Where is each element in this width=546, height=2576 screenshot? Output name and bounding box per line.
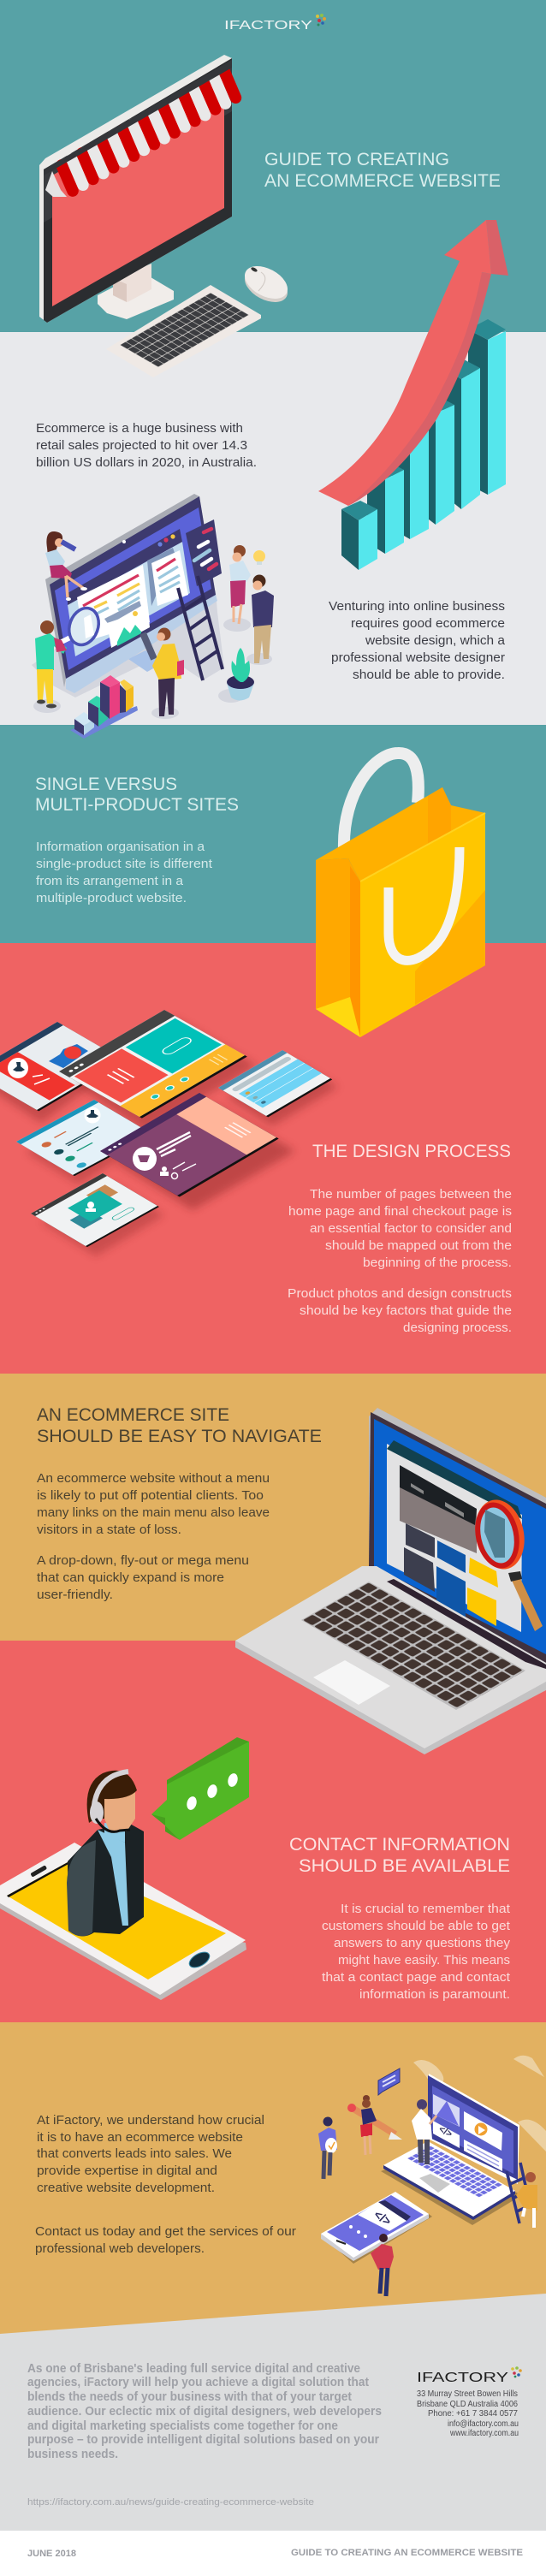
intro text: billion US dollars in 2020, in Australia. — [36, 455, 257, 470]
logo: iFactory footer: IFACTORY — [417, 2371, 508, 2385]
design process text: should be mapped out from the — [325, 1238, 512, 1253]
company description: audience. Our eclectic mix of digital designers, web developers — [27, 2405, 382, 2419]
woman with pencil — [347, 2095, 402, 2155]
big monitor — [45, 494, 217, 693]
contact text: might have easily. This means — [338, 1953, 510, 1968]
icon: smartphone — [0, 1843, 246, 2000]
single product text — [36, 840, 213, 905]
headset — [90, 1772, 130, 1831]
heading: contact information: CONTACT INFORMATION — [289, 1835, 510, 1855]
single product text: multiple-product website. — [36, 891, 187, 905]
person with green top — [33, 620, 67, 713]
logo: iFactory footer — [417, 2366, 522, 2385]
title: GUIDE TO CREATING — [264, 150, 449, 169]
icon: support agent with headset — [67, 1771, 144, 1937]
design process text: beginning of the process. — [363, 1255, 512, 1270]
venturing text: requires good ecommerce — [351, 616, 505, 631]
floor shadow — [32, 591, 224, 697]
company description: purpose – to provide intelligent digital solutions based on your — [27, 2433, 379, 2447]
intro text: retail sales projected to hit over 14.3 — [36, 438, 247, 453]
purple laptop — [381, 2074, 522, 2225]
arrow: rising red arrow — [318, 220, 508, 506]
single product text: Information organisation in a — [36, 840, 205, 854]
man in yellow — [143, 628, 184, 719]
panel: gold ifactory background — [0, 2022, 546, 2334]
navigation text: many links on the main menu also leave — [37, 1505, 270, 1520]
heading: the design process: THE DESIGN PROCESS — [312, 1142, 511, 1161]
laptop lid — [369, 1408, 546, 1665]
icon: keyboard — [106, 285, 261, 377]
intro text — [36, 421, 257, 470]
logo: iFactory header: IFACTORY — [224, 19, 312, 33]
ifactory text: professional web developers. — [35, 2241, 205, 2256]
contact text: information is paramount. — [359, 1987, 510, 2002]
icon: green chat bubble — [151, 1737, 249, 1840]
navigation text — [37, 1471, 270, 1602]
card: purple and peach page — [100, 1093, 295, 1210]
icon: yellow shopping bag — [316, 753, 485, 1037]
bag front handle — [389, 847, 460, 960]
panel: red design process background — [0, 943, 546, 1374]
bag side — [316, 858, 360, 1037]
navigation text: that can quickly expand is more — [37, 1570, 224, 1585]
monitor frame — [39, 55, 232, 323]
mini bar chart — [70, 675, 138, 739]
heading: easy to navigate: SHOULD BE EASY TO NAVIGATE — [37, 1427, 322, 1446]
company description — [27, 2362, 382, 2461]
address block: www.ifactory.com.au — [449, 2429, 519, 2438]
contact text — [322, 1902, 511, 2002]
ifactory text: it is to have an ecommerce website — [37, 2130, 243, 2145]
address block: Brisbane QLD Australia 4006 — [417, 2400, 518, 2409]
navigation text: A drop-down, fly-out or mega menu — [37, 1553, 249, 1568]
illustration: web developers team — [318, 2056, 546, 2296]
heading: single versus multi-product sites: MULTI-PRODUCT SITES — [35, 795, 239, 815]
company description: agencies, iFactory will help you achieve a digital solution that — [27, 2376, 369, 2389]
heading: easy to navigate — [37, 1405, 322, 1446]
footer date: JUNE 2018 — [27, 2549, 76, 2559]
contact text: answers to any questions they — [334, 1936, 510, 1950]
purple phone — [321, 2192, 432, 2264]
design process text: The number of pages between the — [310, 1187, 512, 1202]
navigation text: An ecommerce website without a menu — [37, 1471, 270, 1486]
laptop base — [235, 1566, 546, 1754]
heading: contact information — [289, 1835, 510, 1876]
illustration: website page cards — [0, 1010, 338, 1256]
card: teal and yellow layout — [59, 1010, 257, 1131]
panel: white footer strip — [0, 2531, 546, 2576]
awning top edge — [44, 60, 232, 175]
address block: 33 Murray Street Bowen Hills — [417, 2389, 518, 2399]
bag front — [360, 813, 485, 1037]
single product text: from its arrangement in a — [36, 874, 184, 888]
bar 4 — [418, 395, 454, 525]
woman with red skirt — [223, 545, 251, 632]
venturing text: professional website designer — [331, 650, 505, 665]
bag back handle — [344, 753, 418, 849]
ifactory text — [35, 2113, 296, 2256]
bar 3 — [392, 420, 429, 539]
intro text: Ecommerce is a huge business with — [36, 421, 243, 436]
agent hair — [87, 1771, 137, 1823]
agent jacket — [68, 1823, 144, 1936]
bag inner — [316, 787, 485, 881]
design process text: designing process. — [403, 1321, 512, 1335]
address block: info@ifactory.com.au — [448, 2419, 519, 2429]
design process text: should be key factors that guide the — [300, 1303, 512, 1318]
bar 5 — [443, 359, 480, 509]
side panel — [186, 519, 222, 586]
panel: teal single versus multi-product background — [0, 725, 546, 943]
address block: Phone: +61 7 3844 0577 — [428, 2409, 518, 2419]
ifactory text: At iFactory, we understand how crucial — [37, 2113, 264, 2128]
contact text: customers should be able to get — [322, 1919, 511, 1933]
stand — [128, 650, 163, 672]
ifactory text: provide expertise in digital and — [37, 2163, 217, 2178]
ladder — [178, 576, 223, 680]
company description: blends the needs of your business with that of your target — [27, 2390, 352, 2404]
man in navy — [246, 575, 274, 665]
card: teal profile page — [31, 1173, 164, 1256]
potted plant — [218, 648, 254, 703]
ifactory text: creative website development. — [37, 2181, 215, 2195]
design process text: home page and final checkout page is — [288, 1204, 512, 1219]
venturing text: website design, which a — [365, 633, 506, 648]
screen — [52, 77, 224, 306]
heading: single versus multi-product sites: SINGLE VERSUS — [35, 775, 177, 794]
agent shirt — [98, 1830, 128, 1926]
bar 2 — [367, 460, 404, 554]
icon: mouse — [240, 259, 293, 309]
venturing text — [329, 599, 506, 682]
contact text: It is crucial to remember that — [341, 1902, 511, 1916]
company description: As one of Brisbane's leading full service digital and creative — [27, 2362, 360, 2376]
ifactory text: that converts leads into sales. We — [37, 2146, 232, 2161]
company description: business needs. — [27, 2448, 118, 2461]
design process text — [288, 1187, 512, 1335]
clouds — [413, 2056, 546, 2152]
monitor stand — [98, 264, 174, 319]
woman with binoculars — [45, 531, 87, 601]
man holding check badge — [318, 2117, 337, 2179]
purple laptop: </> — [437, 2124, 454, 2140]
ifactory text: Contact us today and get the services of our — [35, 2224, 296, 2239]
design process text: an essential factor to consider and — [310, 1221, 512, 1236]
man at screen — [412, 2099, 436, 2164]
heading: easy to navigate: AN ECOMMERCE SITE — [37, 1405, 229, 1425]
navigation text: user-friendly. — [37, 1588, 113, 1602]
card: pale contacts page — [16, 1100, 152, 1184]
woman under phone — [371, 2234, 394, 2296]
card: red profile page — [0, 1022, 124, 1123]
title: AN ECOMMERCE WEBSITE — [264, 171, 501, 191]
bar 1 — [341, 501, 377, 570]
venturing text: should be able to provide. — [353, 668, 505, 682]
chat bubble — [378, 2069, 400, 2095]
panel: grey company footer background — [0, 2294, 546, 2531]
title — [264, 150, 501, 191]
illustration: team building website — [32, 494, 274, 739]
bar chart: cyan growth bars — [341, 319, 506, 570]
magnifying glass — [469, 1495, 543, 1631]
logo: iFactory header — [224, 14, 326, 33]
icon: laptop with magnifier — [235, 1408, 546, 1754]
address block — [417, 2389, 519, 2438]
purple phone: </> — [371, 2207, 394, 2229]
icon: desktop monitor with shop awning — [39, 55, 235, 323]
contact text: that a contact page and contact — [322, 1970, 511, 1985]
ladder and orange figure — [507, 2163, 537, 2228]
panel: red contact background — [0, 1641, 546, 2022]
card: blue list page — [218, 1050, 338, 1126]
source url: https://ifactory.com.au/news/guide-creating-ecommerce-website — [27, 2497, 314, 2508]
heading: single versus multi-product sites — [35, 775, 239, 815]
heading: contact information: SHOULD BE AVAILABLE — [299, 1856, 510, 1876]
lightbulb — [253, 550, 265, 565]
venturing text: Venturing into online business — [329, 599, 505, 614]
panel: light grey intro background — [0, 332, 546, 725]
footer title: GUIDE TO CREATING AN ECOMMERCE WEBSITE — [291, 2548, 523, 2558]
navigation text: is likely to put off potential clients. Too — [37, 1488, 264, 1503]
bar 6 — [468, 319, 506, 495]
single product text: single-product site is different — [36, 857, 213, 871]
magnifier — [58, 604, 104, 649]
panel: gold navigation background — [0, 1374, 546, 1641]
company description: and digital marketing specialists come together for one — [27, 2419, 338, 2433]
awning stripes — [45, 72, 235, 197]
navigation text: visitors in a state of loss. — [37, 1522, 181, 1537]
agent face — [104, 1789, 135, 1831]
panel: teal header background — [0, 0, 546, 332]
design process text: Product photos and design constructs — [288, 1286, 512, 1301]
